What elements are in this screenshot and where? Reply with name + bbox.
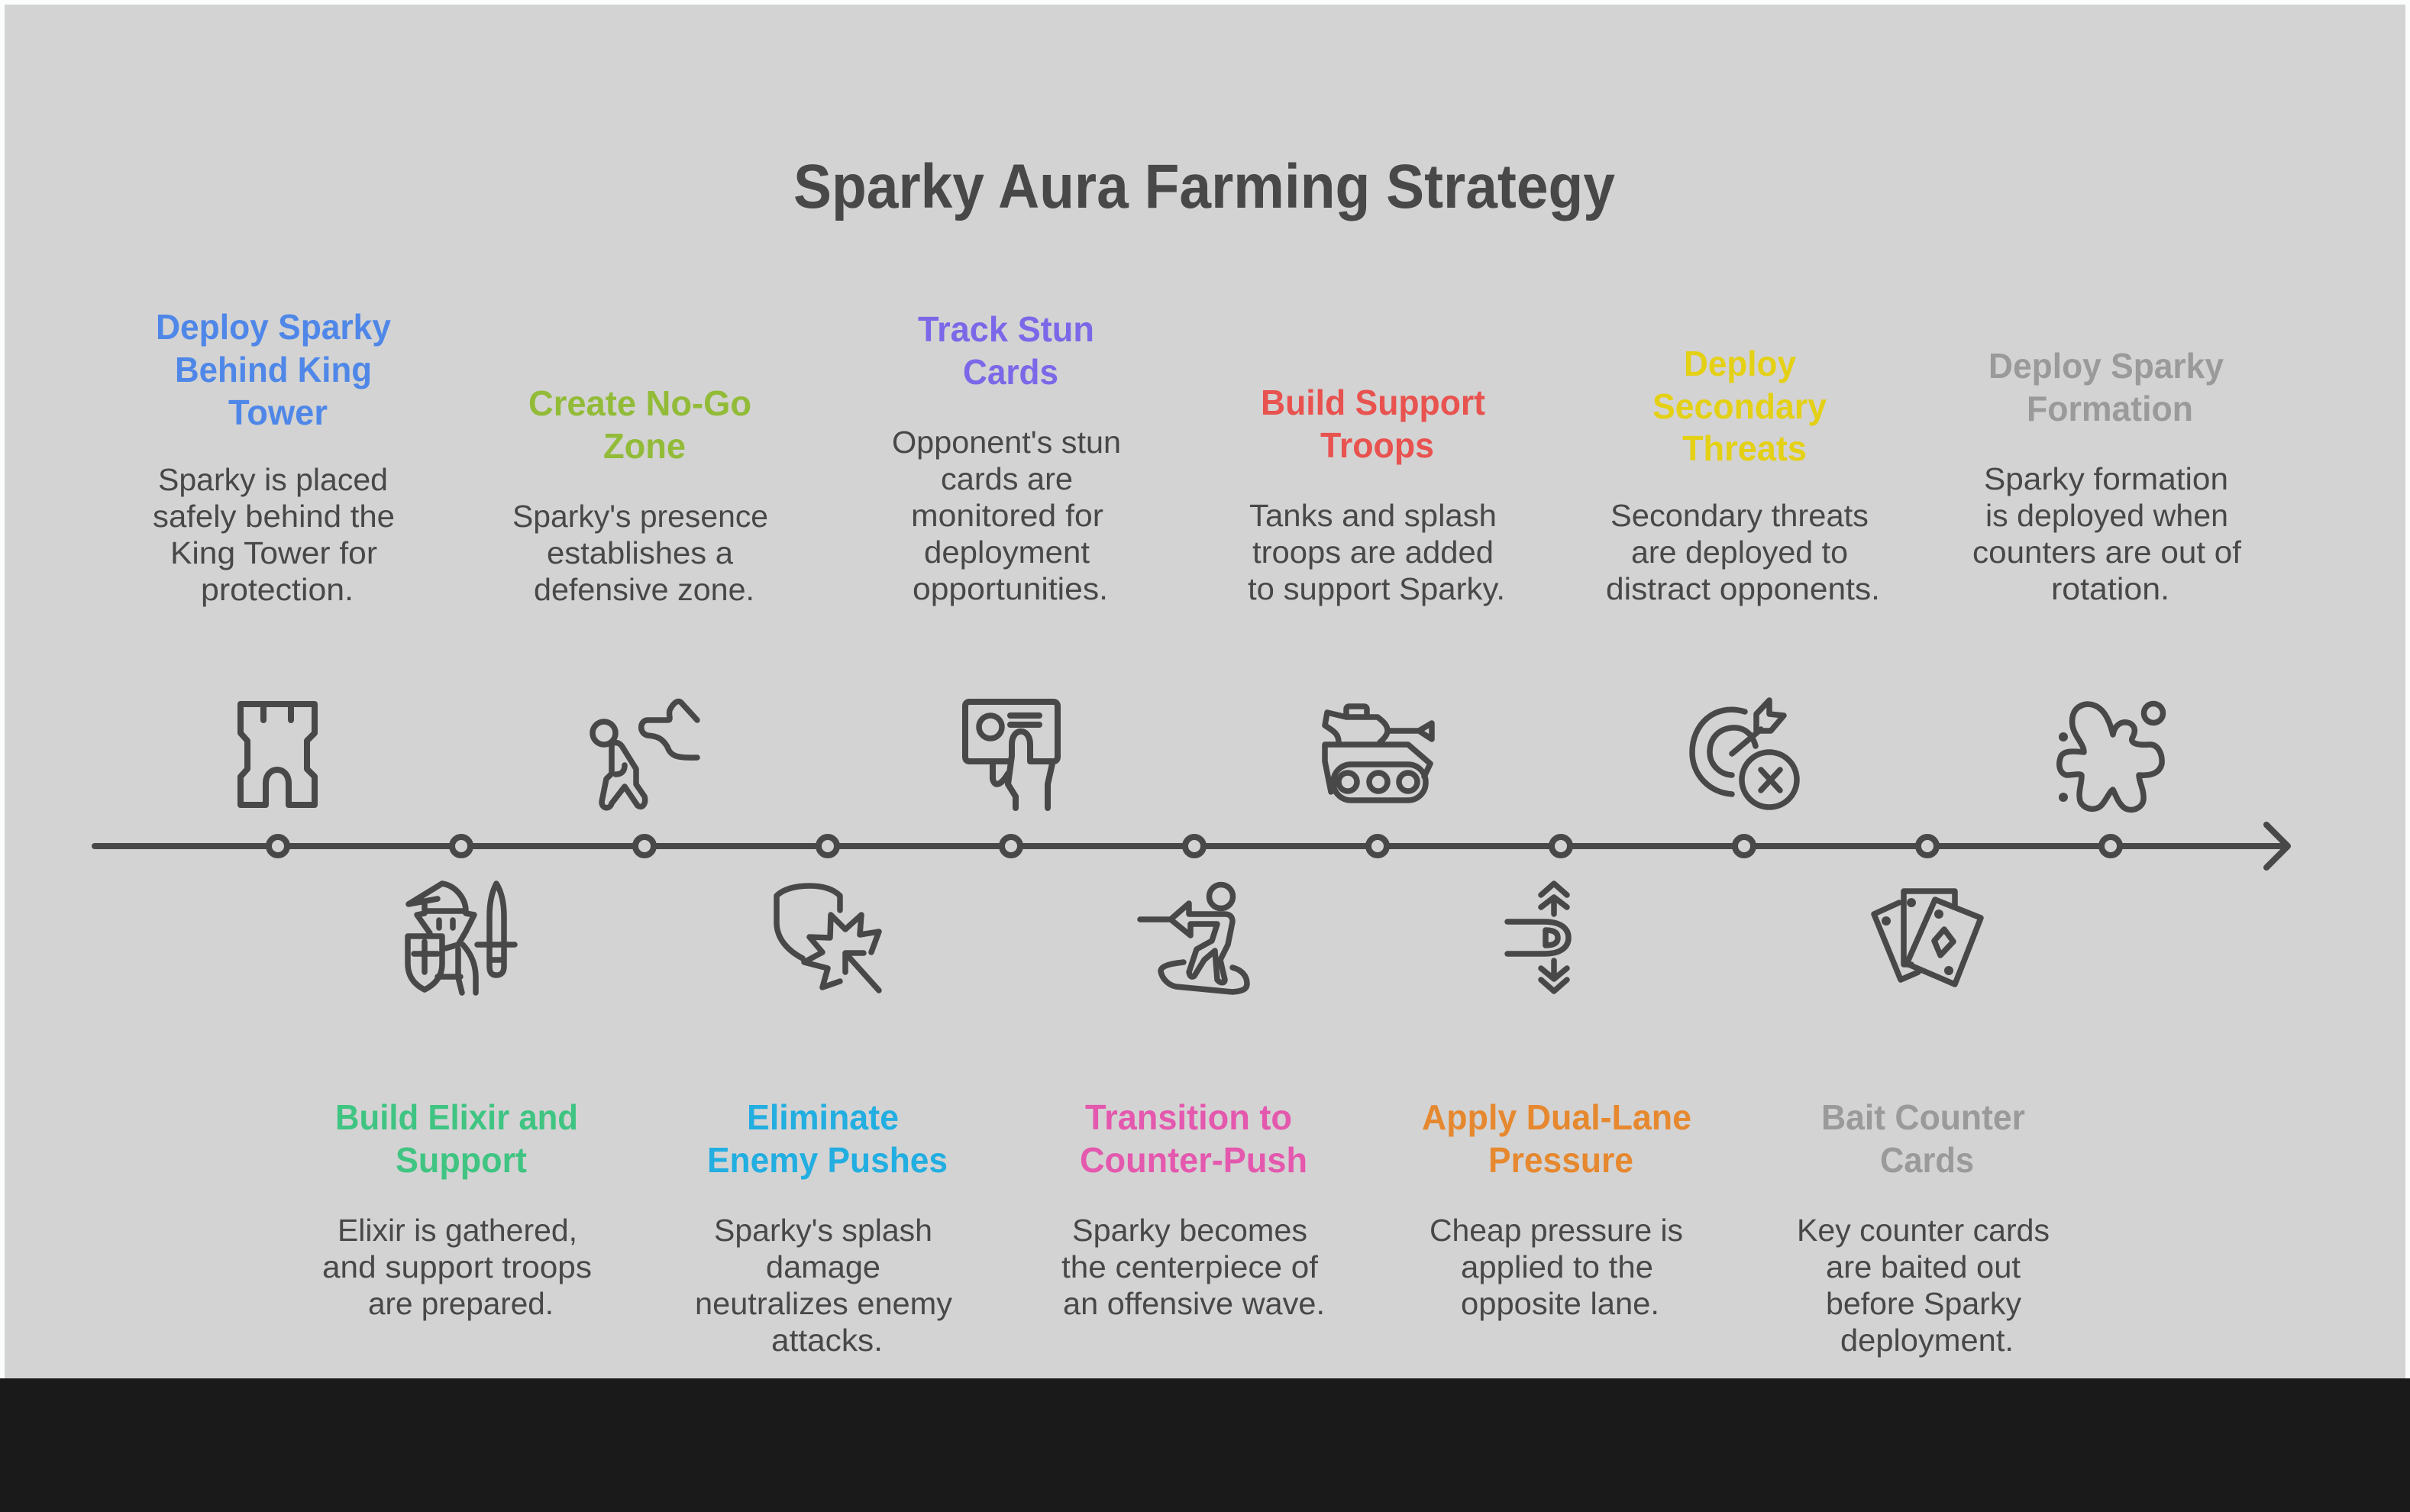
description: Key counter cards bbox=[1797, 1213, 2050, 1248]
icon: castle tower bbox=[241, 704, 315, 805]
icon: playing cards bbox=[1874, 891, 1981, 984]
description: Sparky becomes bbox=[1072, 1213, 1307, 1248]
description: defensive zone. bbox=[534, 572, 754, 607]
icon: target with cross bbox=[1692, 700, 1797, 807]
description: Sparky's presence bbox=[512, 499, 768, 534]
description: protection. bbox=[201, 572, 354, 607]
heading bbox=[335, 1097, 578, 1180]
heading: Cards bbox=[963, 352, 1058, 392]
description: and support troops bbox=[322, 1249, 592, 1284]
description: Sparky formation bbox=[1984, 461, 2228, 496]
step 2: Build Elixir and Support bbox=[322, 884, 592, 1321]
icon: figure and no-go squiggle bbox=[593, 701, 697, 808]
description: are deployed to bbox=[1631, 535, 1848, 570]
description: applied to the bbox=[1461, 1249, 1653, 1284]
description: opposite lane. bbox=[1461, 1286, 1659, 1321]
heading: Cards bbox=[1880, 1140, 1974, 1180]
description: Sparky's splash bbox=[714, 1213, 932, 1248]
step 10: Bait Counter Cards bbox=[1797, 891, 2050, 1358]
heading: Formation bbox=[2027, 389, 2193, 428]
description: neutralizes enemy bbox=[695, 1286, 952, 1321]
icon: tank bbox=[1325, 706, 1432, 800]
description bbox=[1248, 498, 1505, 606]
heading: Create No-Go bbox=[528, 383, 751, 423]
description: is deployed when bbox=[1985, 498, 2228, 533]
description: cards are bbox=[941, 461, 1073, 496]
description bbox=[512, 499, 768, 607]
heading: Zone bbox=[603, 426, 686, 466]
heading: Deploy bbox=[1684, 344, 1796, 383]
heading bbox=[1652, 344, 1827, 468]
heading: Build Elixir and bbox=[335, 1097, 578, 1137]
description: are baited out bbox=[1826, 1249, 2021, 1284]
icon: splash bbox=[2059, 704, 2163, 809]
heading: Bait Counter bbox=[1821, 1097, 2025, 1137]
step 5: Track Stun Cards bbox=[892, 309, 1121, 808]
step 11: Deploy Sparky Formation bbox=[1972, 346, 2242, 809]
step 6: Transition to Counter-Push bbox=[1061, 884, 1325, 1321]
description: Cheap pressure is bbox=[1430, 1213, 1683, 1248]
icon: knight with shield and sword bbox=[408, 884, 515, 993]
description bbox=[1797, 1213, 2050, 1358]
heading: Enemy Pushes bbox=[707, 1140, 948, 1180]
description: Opponent's stun bbox=[892, 425, 1121, 460]
heading: Eliminate bbox=[747, 1097, 899, 1137]
heading bbox=[1988, 346, 2224, 428]
step 9: Deploy Secondary Threats bbox=[1606, 344, 1880, 807]
description: distract opponents. bbox=[1606, 571, 1880, 606]
description: damage bbox=[766, 1249, 880, 1284]
description: opportunities. bbox=[913, 571, 1108, 606]
title: Sparky Aura Farming Strategy bbox=[793, 152, 1615, 221]
icon: dual-lane arrows bbox=[1507, 884, 1568, 991]
description: the centerpiece of bbox=[1061, 1249, 1319, 1284]
description bbox=[695, 1213, 952, 1358]
step 4: Eliminate Enemy Pushes bbox=[695, 886, 952, 1358]
heading: Deploy Sparky bbox=[1988, 346, 2224, 386]
description: deployment bbox=[924, 535, 1090, 570]
description: establishes a bbox=[547, 535, 733, 570]
description bbox=[1430, 1213, 1683, 1321]
icon: shield and burst bbox=[777, 886, 879, 990]
description: Sparky is placed bbox=[158, 462, 388, 497]
heading: Counter-Push bbox=[1080, 1140, 1307, 1180]
description bbox=[153, 462, 395, 607]
heading: Deploy Sparky bbox=[156, 307, 391, 347]
heading bbox=[1080, 1097, 1307, 1180]
description: Secondary threats bbox=[1610, 498, 1869, 533]
icon: rider on board with arrow bbox=[1140, 884, 1247, 992]
heading: Track Stun bbox=[918, 309, 1094, 349]
description: safely behind the bbox=[153, 499, 395, 534]
description: monitored for bbox=[911, 498, 1103, 533]
description: to support Sparky. bbox=[1248, 571, 1505, 606]
description: troops are added bbox=[1252, 535, 1494, 570]
icon: card with pointing hand bbox=[965, 702, 1058, 808]
description bbox=[1606, 498, 1880, 606]
heading bbox=[707, 1097, 948, 1180]
heading bbox=[1422, 1097, 1691, 1180]
heading: Behind King bbox=[175, 350, 372, 389]
heading: Troops bbox=[1320, 425, 1434, 465]
description: before Sparky bbox=[1826, 1286, 2022, 1321]
step 3: Create No-Go Zone bbox=[512, 383, 768, 808]
description: Elixir is gathered, bbox=[338, 1213, 577, 1248]
heading: Apply Dual-Lane bbox=[1422, 1097, 1691, 1137]
heading: Tower bbox=[228, 393, 328, 432]
description: Tanks and splash bbox=[1249, 498, 1497, 533]
description: an offensive wave. bbox=[1063, 1286, 1325, 1321]
description bbox=[892, 425, 1121, 606]
heading: Pressure bbox=[1488, 1140, 1633, 1180]
step 7: Build Support Troops bbox=[1248, 383, 1505, 800]
heading bbox=[1261, 383, 1485, 465]
description: counters are out of bbox=[1972, 535, 2242, 570]
description bbox=[1972, 461, 2242, 606]
description: King Tower for bbox=[170, 535, 377, 570]
description bbox=[1061, 1213, 1325, 1321]
description bbox=[322, 1213, 592, 1321]
heading: Threats bbox=[1682, 428, 1807, 468]
heading bbox=[528, 383, 751, 466]
heading bbox=[918, 309, 1094, 392]
footer: dark band bbox=[0, 1378, 2410, 1512]
heading: Build Support bbox=[1261, 383, 1485, 422]
heading: Support bbox=[396, 1140, 527, 1180]
description: are prepared. bbox=[368, 1286, 554, 1321]
step 1: Deploy Sparky Behind King Tower bbox=[153, 307, 395, 805]
description: attacks. bbox=[771, 1323, 883, 1358]
heading: Transition to bbox=[1085, 1097, 1292, 1137]
timeline: arrow with nodes bbox=[95, 825, 2288, 867]
step 8: Apply Dual-Lane Pressure bbox=[1422, 884, 1691, 1321]
description: rotation. bbox=[2051, 571, 2169, 606]
heading bbox=[156, 307, 391, 432]
description: deployment. bbox=[1840, 1323, 2014, 1358]
heading: Secondary bbox=[1652, 386, 1827, 426]
heading bbox=[1821, 1097, 2025, 1180]
